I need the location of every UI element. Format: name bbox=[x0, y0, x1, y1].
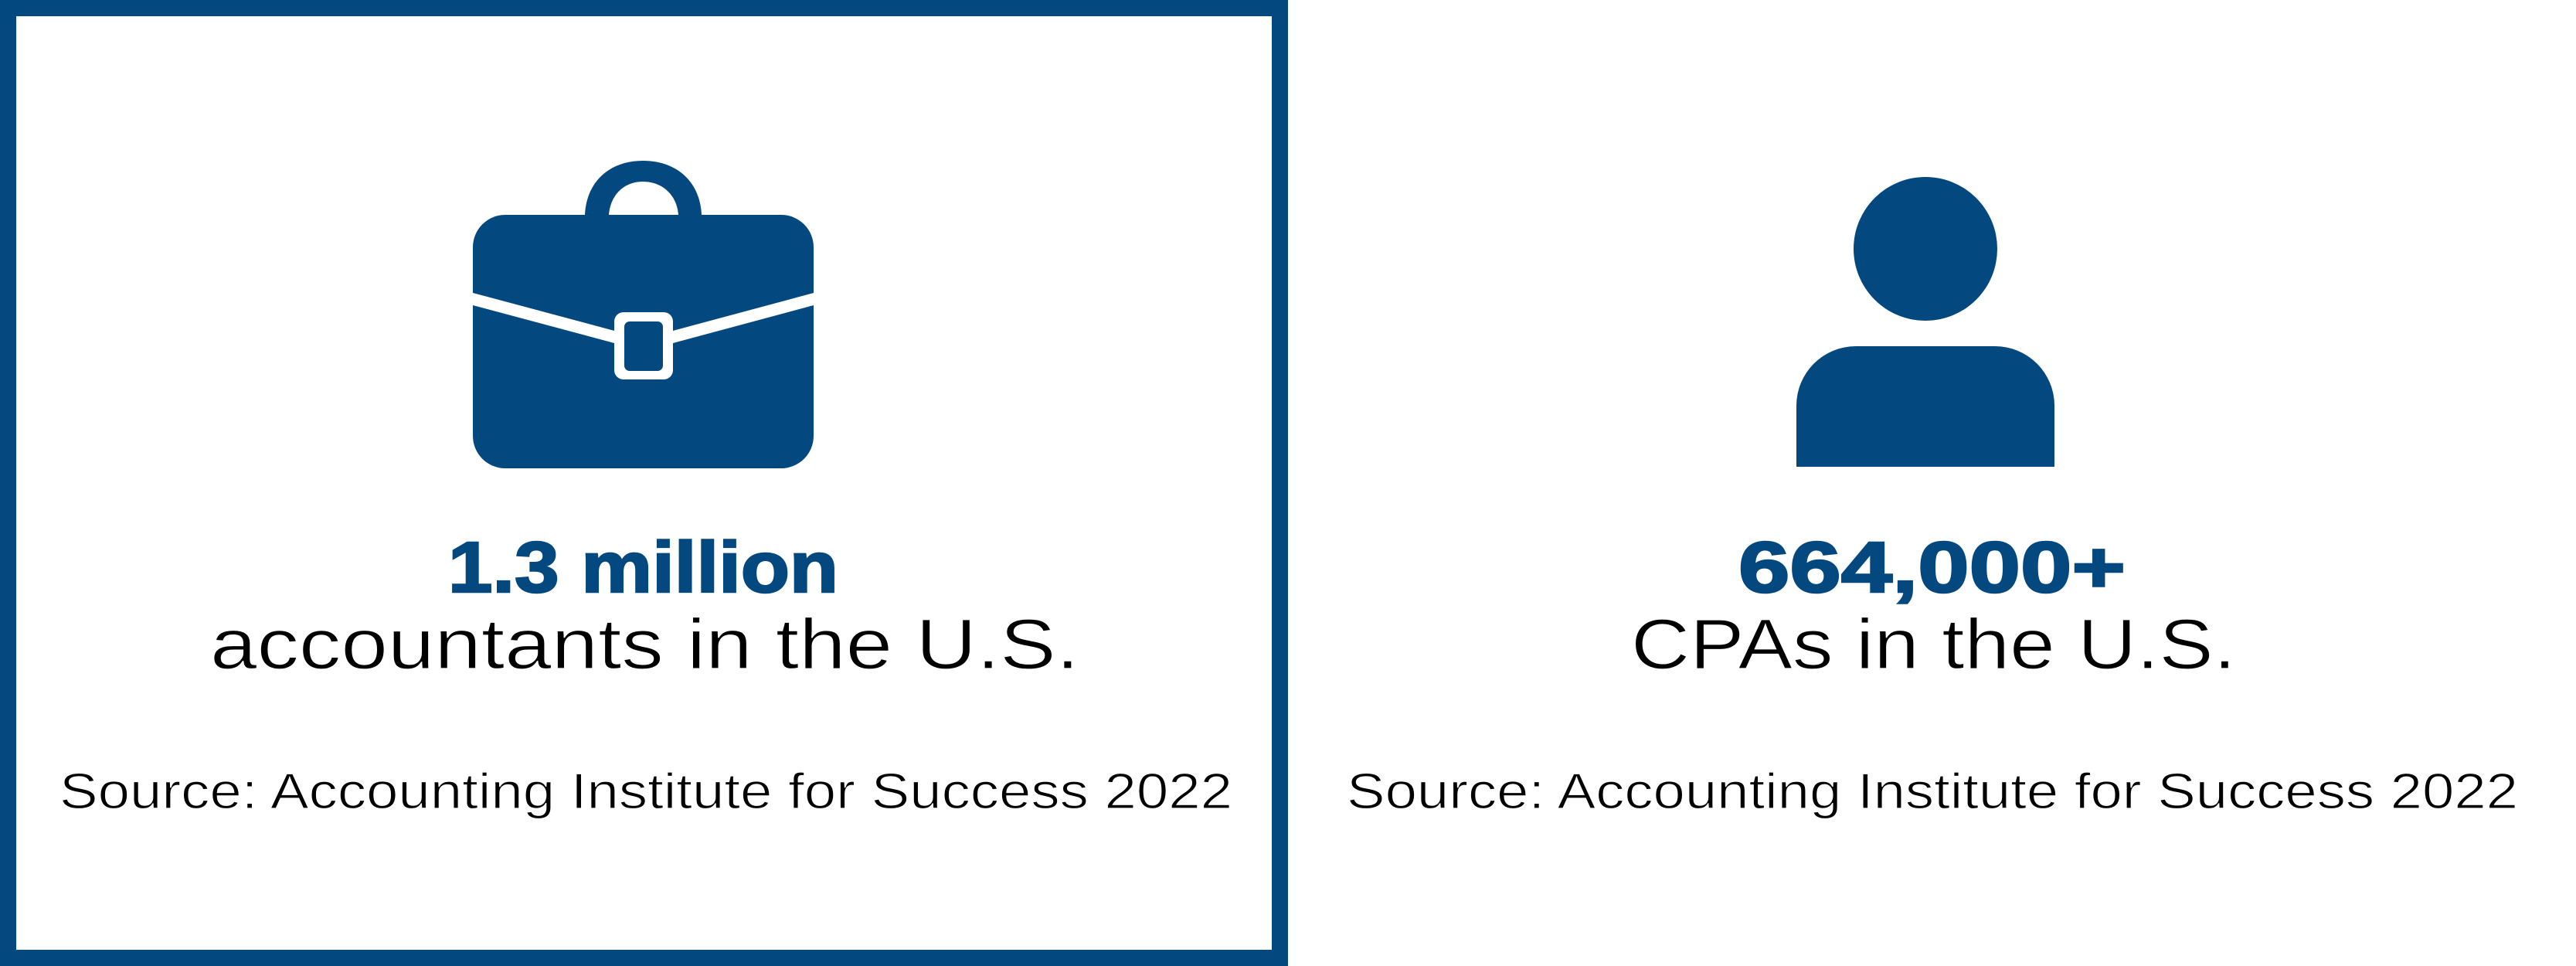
icon: person bbox=[1796, 177, 2054, 467]
panel: accountants bbox=[8, 8, 1280, 958]
panel: CPAs bbox=[1347, 177, 2518, 819]
icon: briefcase bbox=[473, 161, 814, 468]
stat: 1.3 million: 1.3 million bbox=[448, 527, 838, 607]
source: CPAs: Source: Accounting Institute for Success 2022 bbox=[1347, 763, 2518, 819]
label: accountants in the U.S.: accountants in the U.S. bbox=[210, 605, 1079, 684]
label: CPAs in the U.S.: CPAs in the U.S. bbox=[1631, 605, 2236, 684]
source: accountants: Source: Accounting Institute for Success 2022 bbox=[59, 763, 1232, 819]
stat: 664,000+: 664,000+ bbox=[1738, 527, 2126, 607]
panel border bbox=[8, 8, 1280, 958]
